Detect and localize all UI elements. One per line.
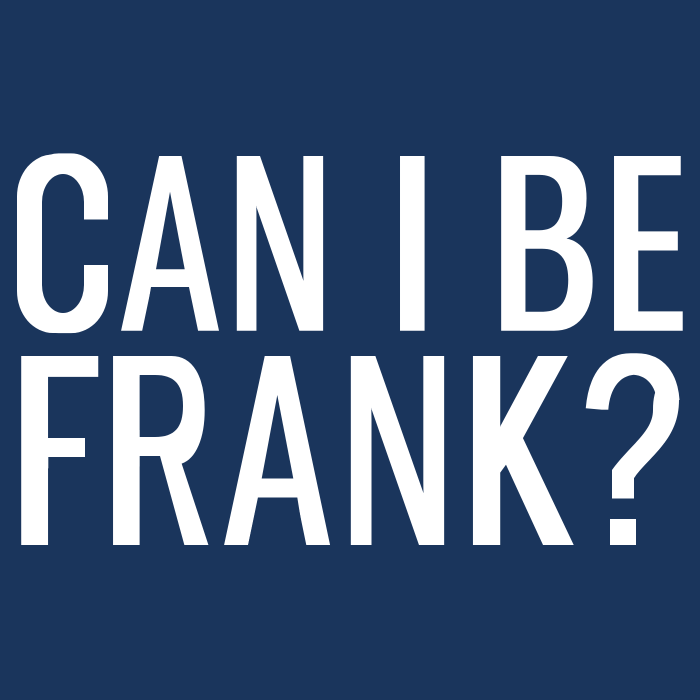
headline line 2: FRANK?: R <box>109 297 208 604</box>
headline line 2: FRANK?: A <box>229 296 325 604</box>
headline line 1: CAN I BE: E <box>613 100 679 385</box>
headline line 1: CAN I BE <box>17 100 679 386</box>
headline line 2: FRANK?: K <box>467 298 569 604</box>
headline line 2: FRANK?: F <box>18 297 96 604</box>
headline line 1: CAN I BE: I <box>388 102 437 385</box>
headline line 2: FRANK? <box>18 296 695 604</box>
headline line 1: CAN I BE: B <box>494 102 596 385</box>
headline line 1: CAN I BE: N <box>229 102 331 385</box>
headline line 2: FRANK?: N <box>342 298 453 604</box>
headline line 1: CAN I BE: C <box>17 102 106 385</box>
headline line 2: FRANK?: ? <box>581 296 684 604</box>
headline line 1: CAN I BE: A <box>125 102 215 386</box>
